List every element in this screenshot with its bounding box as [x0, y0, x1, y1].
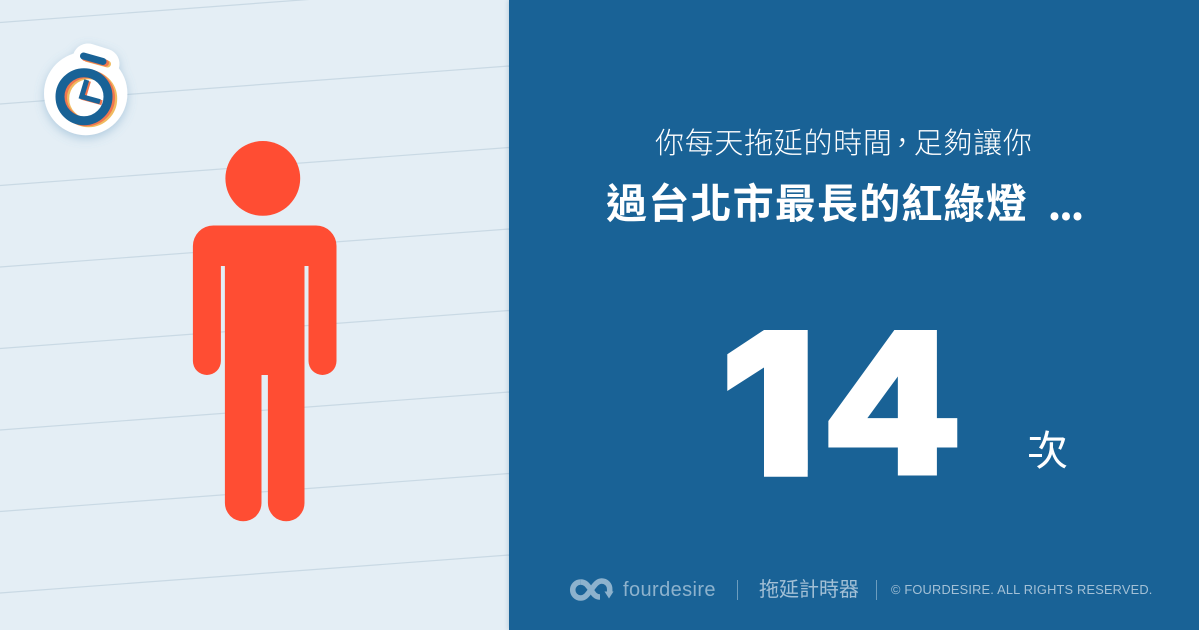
digit four: 4 [830, 291, 953, 514]
footer divider left [737, 580, 738, 600]
icon: fourdesire logo [570, 578, 614, 601]
icon: stopwatch logo [40, 42, 132, 142]
title text: 過台北市最長的紅綠燈 [606, 181, 1028, 227]
digit one: 1 [727, 293, 836, 512]
copyright: © FOURDESIRE. ALL RIGHTS RESERVED. [891, 582, 1153, 597]
icon: person figure [192, 141, 336, 522]
product name: 拖延計時器 [759, 579, 859, 601]
title ellipsis: ... [1048, 171, 1082, 233]
panel: result panel [509, 0, 1199, 630]
footer bar [570, 578, 1153, 601]
digit flag [727, 330, 764, 391]
panel: left notebook background [0, 0, 509, 630]
subtitle text: 你每天拖延的時間，足夠讓你 [655, 120, 1033, 162]
big number [727, 330, 958, 477]
unit label: 次 [1027, 428, 1068, 474]
footer divider right [876, 580, 877, 600]
brand name: fourdesire [623, 579, 716, 601]
